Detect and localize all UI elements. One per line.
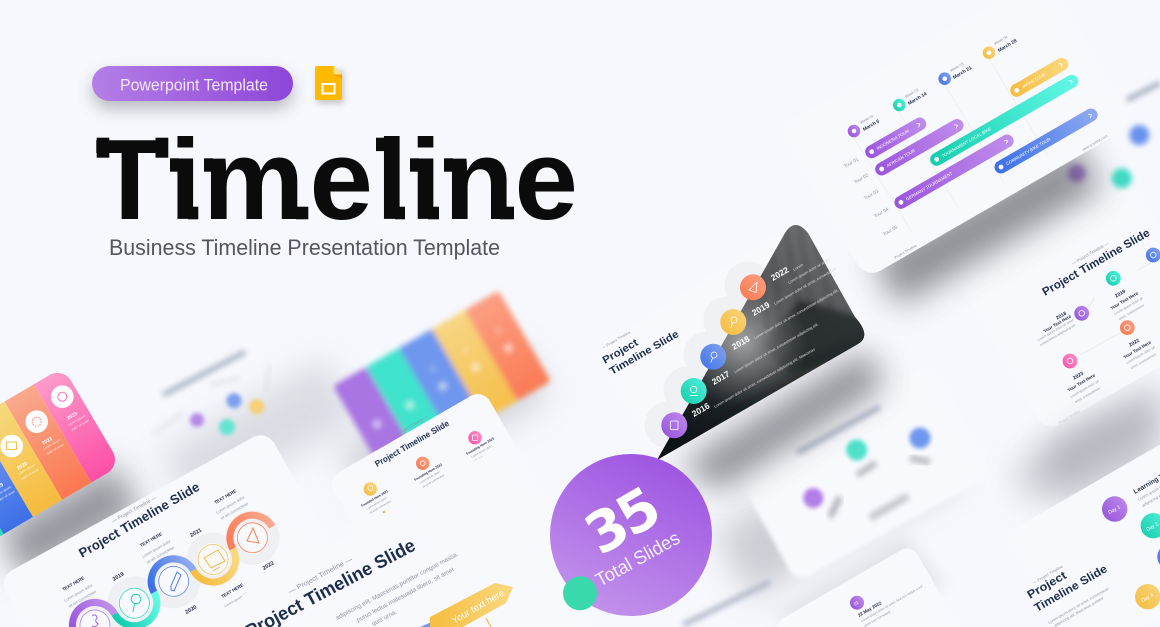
header: week 04: March 28	[997, 38, 1018, 54]
milestone: pink: Founding Here 2023	[466, 437, 495, 456]
year labels: 2022	[262, 560, 275, 572]
panel: dated list slide, bottom centre	[770, 535, 982, 627]
milestone: orange	[414, 457, 445, 489]
row labels: Tour 04	[873, 206, 890, 220]
wave ribbon	[58, 501, 289, 627]
number 35: 35	[575, 476, 669, 568]
callout texts: sit am consectetur	[219, 500, 250, 521]
step: 2019	[720, 266, 838, 335]
badge label: Total Slides	[592, 528, 684, 591]
step halos	[644, 262, 772, 448]
bar: Indonesia tour	[863, 115, 929, 161]
header: week 02: March 14	[907, 91, 928, 107]
callout texts: TEXT HERE	[139, 531, 163, 548]
bar: Japan tour	[1008, 55, 1071, 99]
step circle 01	[850, 596, 864, 610]
panel: right milestone slide	[961, 185, 1160, 510]
template pill: Powerpoint Template	[120, 76, 268, 94]
step: 2022: Lorem ipsum dolor sit amet	[787, 257, 831, 285]
icon: google slides	[315, 66, 344, 104]
column 2020: 2020	[16, 461, 29, 472]
ring: blue	[151, 559, 196, 604]
bar: African tour	[873, 117, 966, 178]
panel: gantt timeline slide	[778, 0, 1134, 306]
milestone labels	[1037, 289, 1158, 425]
bar: Germany tournament	[892, 132, 1016, 211]
header: week 03: March 21	[952, 65, 973, 81]
ring: orange	[230, 515, 275, 560]
step: 2017: Lorem ipsum dolor sit amet, consectetuer adipiscing elit.	[733, 321, 819, 374]
step text: 22 May 2022	[857, 600, 883, 618]
day circles: Day 4	[1140, 592, 1155, 604]
milestone labels: 2022	[1128, 338, 1141, 349]
milestone: yellow	[360, 482, 392, 515]
bar: African tour: AFRICAN TOUR	[886, 148, 916, 168]
blurred slide: right of gantt	[1068, 83, 1160, 188]
ring: purple	[73, 603, 117, 627]
row labels: Tour 05	[882, 224, 899, 238]
slide title: Timeline Slide	[608, 328, 681, 378]
step text: Lorem ipsum dolor sit amet. Sed non neque si est	[860, 584, 923, 623]
callout texts: sit am consectetur	[67, 588, 98, 609]
milestone labels: amet, consectetuer	[1118, 303, 1146, 321]
year labels: 2020	[184, 604, 198, 616]
milestone labels: Your Text Here	[1109, 290, 1140, 311]
gantt footer text: www.yourlink.com	[1082, 134, 1108, 152]
header: week 04: Week 04	[994, 35, 1008, 46]
milestone labels: Your Text Here	[1122, 339, 1153, 360]
blurred slide: top-left timeline	[153, 352, 360, 513]
callout texts: TEXT HERE	[213, 488, 237, 505]
ring: teal	[112, 581, 157, 626]
blurred slide: centre right	[714, 363, 993, 598]
callout texts: Lorem ipsum dolor	[224, 590, 252, 608]
year labels: 2019	[112, 571, 125, 583]
template pill	[92, 66, 293, 109]
bar: Indonesia tour: INDONESIA TOUR	[876, 128, 910, 151]
arrow label text: Your text here	[450, 588, 506, 627]
step circle 01: 01	[853, 600, 860, 607]
column 2023: dolor sit amet	[70, 418, 90, 432]
step: 2019: 2019	[750, 299, 772, 318]
day circles: Day 2	[1145, 521, 1160, 533]
step: 2022: Lorem	[792, 262, 804, 272]
milestone: pink: sit amet	[474, 454, 484, 463]
blurred colour bar slide	[333, 290, 551, 503]
step: 2016	[661, 347, 816, 438]
milestone: orange: sit amet consectetur	[422, 473, 445, 489]
milestone labels: consectetuer adipiscing elit	[1039, 323, 1076, 347]
header: week 03	[938, 62, 973, 85]
row labels: Tour 01	[843, 156, 860, 170]
icon: monitor	[204, 550, 225, 571]
step: 2017: 2017	[710, 368, 732, 387]
row labels: Tour 02	[853, 172, 870, 186]
caption: — Project Timeline	[1032, 563, 1064, 585]
icon: pencil	[171, 572, 181, 591]
body text: purus lectus malesuada libero, sit amet	[356, 566, 456, 624]
panel: dark photo timeline slide	[594, 210, 885, 490]
callout texts: Lorem ipsum dolor	[215, 494, 246, 515]
milestone labels: 2019	[1114, 289, 1127, 300]
column 2022	[25, 410, 65, 456]
yellow arrow label	[430, 583, 513, 627]
step: 2018: 2018	[730, 333, 752, 352]
bar: Tournament local bike: TOURNAMENT LOCAL BIKE	[941, 126, 992, 159]
forest photo	[658, 225, 864, 459]
step: 2016: 2016	[690, 400, 712, 419]
step: 2018: Lorem ipsum dolor sit amet, consectetuer adipiscing elit.	[753, 287, 839, 340]
year labels	[112, 527, 275, 616]
day circles	[1102, 496, 1160, 609]
step: 2022: 2022	[769, 264, 791, 283]
caption: — Project Timeline —	[288, 556, 354, 596]
column 2022: 2022	[41, 436, 54, 447]
slide title: Project Timeline Slide	[373, 418, 451, 469]
column 2020: Lorem ipsum	[18, 463, 36, 476]
panel: wave timeline slide	[0, 430, 373, 627]
callout texts: TEXT HERE	[61, 575, 85, 592]
header: week 02	[893, 88, 928, 111]
step: 2016: Lorem ipsum dolor sit amet, consectetuer adipiscing elit. Maecenas	[713, 347, 816, 409]
column 2022: dolor sit amet	[46, 442, 65, 456]
icon: magnifier	[131, 594, 141, 612]
step: 2019: Lorem ipsum dolor sit amet, consectetuer	[773, 266, 838, 306]
milestone labels: Lorem ipsum dolor sit	[1125, 345, 1156, 365]
caption: — Project Timeline —	[394, 415, 428, 437]
column 2020	[0, 435, 40, 481]
body text: adipiscing elit. Maecenas porttitor congue massa.	[335, 551, 460, 622]
callout texts: Lorem ipsum dolor	[63, 582, 94, 603]
slide title: Timeline Slide	[1032, 563, 1110, 615]
slide title: Project Timeline Slide	[76, 479, 202, 561]
header: week 03: Week 03	[950, 62, 964, 73]
milestone: yellow: sit amet consectetur	[368, 499, 392, 515]
column 2020: dolor sit amet	[20, 467, 40, 481]
ring: yellow	[191, 537, 236, 582]
panel: arrow timeline slide	[234, 446, 600, 627]
column 2023	[51, 385, 90, 432]
step: 2017	[681, 321, 819, 404]
row labels: Tour 03	[863, 188, 880, 202]
header: week 01: March 6	[862, 118, 881, 133]
header: week 01: Week 01	[860, 114, 874, 125]
header: week 02: Week 02	[904, 88, 919, 99]
column 2023: Lorem ipsum	[68, 414, 86, 427]
icon: paper plane	[247, 528, 259, 543]
badge: total slides	[550, 454, 712, 616]
bar: Community bike tour	[992, 106, 1100, 176]
slide title: Project Timeline Slide	[1040, 227, 1152, 299]
milestone: yellow: Lorem ipsum dolor	[366, 496, 388, 511]
milestone labels: Your Text Here	[1066, 372, 1097, 393]
milestone labels: Lorem ipsum dolor sit	[1069, 379, 1100, 399]
slide title: Project	[1026, 570, 1069, 602]
year labels: 2021	[189, 527, 203, 539]
milestone: pink: Lorem ipsum dolor	[470, 444, 493, 459]
milestone: orange: Lorem ipsum dolor	[418, 470, 441, 485]
milestone labels: 2023	[1072, 371, 1085, 382]
gantt footer text: Project Timeline	[894, 244, 918, 260]
milestone: yellow: Founded Here 2021	[360, 489, 389, 508]
milestone: orange: Founding Here 2022	[414, 463, 443, 482]
day circles: Day 1	[1107, 504, 1122, 516]
callout texts: Lorem ipsum dolor	[141, 538, 172, 559]
description: adipiscing elit. Maecenas porttitor	[1054, 596, 1105, 627]
slide title: Project	[600, 336, 641, 367]
caption: — Project Timeline —	[111, 495, 159, 525]
green accent dot	[563, 576, 597, 610]
callout texts: sit am consectetur	[145, 544, 176, 565]
milestones	[1063, 248, 1160, 368]
milestone labels: Lorem ipsum dolor sit	[1113, 296, 1144, 316]
milestone: pink	[466, 431, 495, 463]
subtitle: Business Timeline Presentation Template	[109, 235, 500, 260]
description: Lorem ipsum dolor sit amet, consectetuer	[1048, 586, 1110, 625]
row labels	[843, 156, 899, 238]
header: week 01	[848, 114, 881, 137]
header: week 04	[983, 35, 1018, 59]
blurred slide title: bottom centre	[683, 582, 770, 625]
column 2023: 2023	[66, 411, 79, 422]
milestone labels: Lorem ipsum dolor sit amet	[1037, 318, 1074, 342]
agenda text	[1132, 467, 1160, 508]
milestone labels: 2018	[1055, 311, 1068, 322]
callout texts: TEXT HERE	[220, 582, 244, 599]
bar: Tournament local bike	[928, 72, 1081, 168]
step: 2022	[740, 257, 831, 300]
column 2022: Lorem ipsum	[42, 438, 61, 451]
arrow stem	[486, 618, 491, 627]
bar: Community bike tour: COMMUNITY BIKE TOUR	[1005, 137, 1051, 166]
milestone labels: amet, consectetuer	[1074, 386, 1102, 404]
gantt footer text	[894, 134, 1108, 260]
slide caption: — Project Timeline —	[1071, 240, 1110, 266]
panel: three milestone slide	[327, 389, 568, 626]
milestone labels: Project Timeline	[1058, 409, 1081, 425]
milestone labels: amet, consectetuer	[1130, 352, 1158, 370]
caption: — Project Timeline	[602, 330, 631, 350]
panel: day agenda slide, bottom right	[1005, 400, 1160, 627]
step: 2018	[700, 287, 839, 370]
icon: puzzle	[92, 615, 98, 627]
title: Timeline	[95, 117, 578, 244]
badge circle	[550, 454, 712, 616]
bar: Japan tour: JAPAN TOUR	[1021, 72, 1046, 90]
panel: colour column slide, top left	[0, 367, 142, 580]
milestone labels: Your Text Here	[1042, 313, 1073, 334]
bar: Germany tournament: GERMANY TOURNAMENT	[905, 171, 954, 202]
callout texts	[61, 488, 252, 609]
column 2019	[0, 482, 16, 503]
blue arrow segment	[420, 621, 447, 627]
